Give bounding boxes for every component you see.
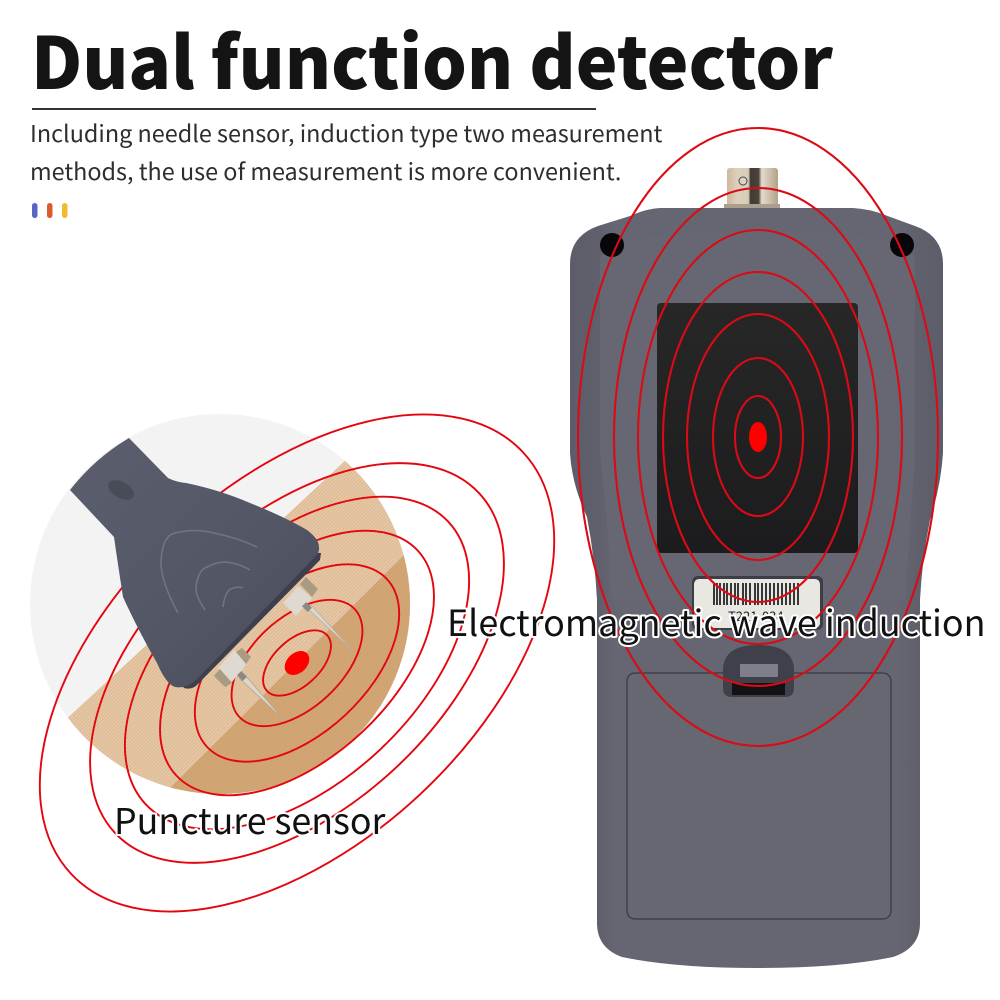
description text xyxy=(30,115,663,187)
probe head xyxy=(70,438,319,687)
title: Dual function detector xyxy=(31,5,834,110)
wood side face xyxy=(170,555,410,794)
probe embossed arcs xyxy=(161,530,257,613)
connector xyxy=(724,168,780,208)
puncture centre dot xyxy=(280,646,314,680)
probe rim xyxy=(176,552,321,689)
disc background xyxy=(30,414,344,718)
latch xyxy=(723,645,794,697)
label: electromagnetic wave induction: Electromagnetic wave induction xyxy=(447,595,986,647)
signal centre dot xyxy=(749,422,767,452)
signal rings: puncture sensor xyxy=(0,321,646,1000)
mounting holes xyxy=(600,233,914,257)
probe needles xyxy=(214,577,352,720)
battery cover xyxy=(627,673,891,919)
barcode label: T221-034 xyxy=(728,606,784,625)
wood top face xyxy=(60,461,420,810)
label: puncture sensor: Puncture sensor xyxy=(114,793,386,845)
wood disc illustration xyxy=(20,410,420,810)
description text: methods, the use of measurement is more convenient. xyxy=(30,153,621,187)
barcode label xyxy=(692,576,823,630)
title underline xyxy=(32,108,596,110)
screen xyxy=(657,303,858,553)
device body xyxy=(570,208,943,968)
device: handheld detector xyxy=(570,168,943,968)
face bevel highlight xyxy=(600,231,915,600)
probe cable shading xyxy=(105,476,137,504)
description text: Including needle sensor, induction type two measurement xyxy=(30,115,663,149)
signal rings: electromagnetic wave xyxy=(578,128,938,746)
probe xyxy=(70,438,352,720)
decorative colour pills xyxy=(32,203,68,218)
